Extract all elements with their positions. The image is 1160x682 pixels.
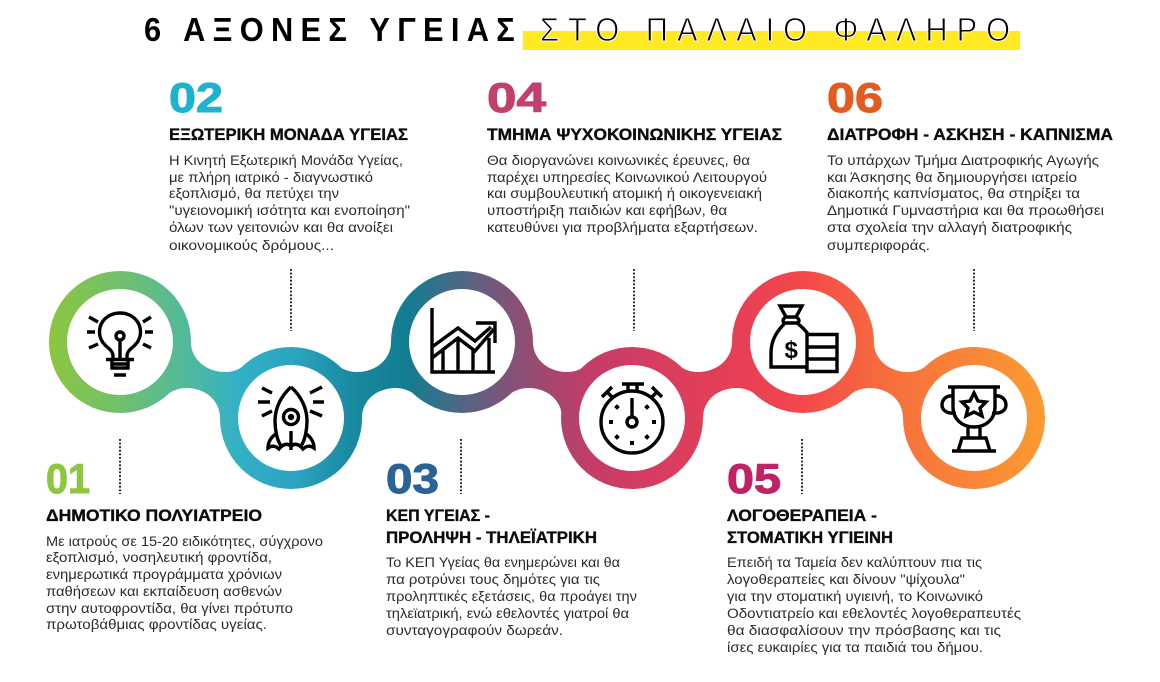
body 02: εξοπλισμό, θα πετύχει την	[169, 186, 339, 201]
heading 05: ΛΟΓΟΘΕΡΑΠΕΙΑ -	[727, 507, 877, 525]
icon: trophy	[942, 387, 1006, 451]
icon: money bag	[771, 306, 837, 372]
body 01: Με ιατρούς σε 15-20 ειδικότητες, σύγχρονο	[46, 534, 323, 549]
heading 03: ΠΡΟΛΗΨΗ - ΤΗΛΕΪΑΤΡΙΚΗ	[386, 529, 597, 547]
number 01: 01	[46, 455, 90, 502]
icon: rocket	[258, 387, 324, 450]
icon: light bulb	[87, 313, 153, 375]
heading 03	[386, 507, 597, 547]
body 05: ίσες ευκαιρίες για τα παιδιά του δήμου.	[727, 640, 983, 655]
body 02: Η Κινητή Εξωτερική Μονάδα Υγείας,	[169, 153, 403, 168]
body 05: λογοθεραπείες και δίνουν "ψίχουλα"	[727, 572, 965, 587]
body 01	[46, 534, 323, 632]
heading 05	[727, 507, 893, 547]
heading 02: ΕΞΩΤΕΡΙΚΗ ΜΟΝΑΔΑ ΥΓΕΙΑΣ	[169, 126, 408, 144]
body 03: συνταγογραφούν δωρεάν.	[386, 623, 563, 638]
body 01: ενημερωτικά προγράμματα χρόνιων	[46, 567, 282, 582]
body 02: με πλήρη ιατρικό - διαγνωστικό	[169, 170, 373, 185]
body 04: Θα διοργανώνει κοινωνικές έρευνες, θα	[487, 153, 750, 168]
body 06: Το υπάρχων Τμήμα Διατροφικής Αγωγής	[827, 153, 1100, 168]
body 03: Το ΚΕΠ Υγείας θα ενημερώνει και θα	[386, 555, 620, 570]
heading 05: ΣΤΟΜΑΤΙΚΗ ΥΓΙΕΙΝΗ	[727, 529, 893, 547]
body 06: και Άσκησης θα δημιουργήσει ιατρείο	[827, 170, 1077, 185]
title	[144, 11, 1020, 50]
connector: 01	[119, 439, 121, 494]
icon: money bag: $	[784, 337, 798, 364]
body 01: εξοπλισμό, νοσηλευτική φροντίδα,	[46, 550, 272, 565]
body 01: πρωτοβάθμιας φροντίδας υγείας.	[46, 617, 267, 632]
body 02: "υγειονομική ισότητα και ενοποίηση"	[169, 203, 410, 218]
panel: 06 nutrition exercise smoking	[827, 74, 1113, 253]
panel: 01 municipal polyclinic	[46, 455, 323, 632]
number 02: 02	[169, 74, 223, 121]
panel: 04 psychosocial health	[487, 74, 782, 235]
body 02: οικονομικούς δρόμους...	[169, 238, 334, 253]
connector: 02	[290, 269, 292, 331]
body 01: παθήσεων και εκπαίδευση ασθενών	[46, 584, 282, 599]
body 03: πα ροτρύνει τους δημότες για τις	[386, 572, 601, 587]
number 05: 05	[727, 455, 781, 502]
body 03	[386, 555, 637, 638]
body 06: στα σχολεία την αλλαγή διατροφικής	[827, 220, 1073, 235]
body 02: όλων των γειτονιών και θα ανοίξει	[169, 220, 393, 235]
highlight bar	[523, 31, 1020, 50]
body 05: Επειδή τα Ταμεία δεν καλύπτουν πια τις	[727, 555, 983, 570]
heading 03: ΚΕΠ ΥΓΕΙΑΣ -	[386, 507, 490, 525]
connector: 03	[460, 439, 462, 494]
body 03: τηλεϊατρική, ενώ εθελοντές γιατροί θα	[386, 606, 629, 621]
heading 04: ΤΜΗΜΑ ΨΥΧΟΚΟΙΝΩΝΙΚΗΣ ΥΓΕΙΑΣ	[487, 126, 782, 144]
body 05: για την στοματική υγιεινή, το Κοινωνικό	[727, 589, 983, 604]
number 04: 04	[487, 74, 547, 121]
body 06: συμπεριφοράς.	[827, 238, 930, 253]
body 05	[727, 555, 1022, 655]
body 05: Οδοντιατρείο και εθελοντές λογοθεραπευτές	[727, 606, 1022, 621]
heading 06: ΔΙΑΤΡΟΦΗ - ΑΣΚΗΣΗ - ΚΑΠΝΙΣΜΑ	[827, 126, 1113, 144]
body 05: θα διασφαλίσουν την πρόσβασης και τις	[727, 623, 1002, 638]
connector: 06	[973, 269, 975, 331]
heading 01: ΔΗΜΟΤΙΚΟ ΠΟΛΥΙΑΤΡΕΙΟ	[46, 507, 262, 525]
panel: 05 speech therapy and oral health	[727, 455, 1022, 655]
title: bold part: 6 ΑΞΟΝΕΣ ΥΓΕΙΑΣ	[144, 11, 515, 48]
connector: 05	[801, 439, 803, 494]
body 06: διακοπής καπνίσματος, θα στηρίξει τα	[827, 186, 1080, 201]
body 06	[827, 153, 1104, 253]
number 06: 06	[827, 74, 883, 121]
body 02	[169, 153, 410, 253]
ribbon timeline	[49, 271, 1045, 489]
body 04: κατευθύνει για προβλήματα εξαρτήσεων.	[487, 220, 758, 235]
body 06: Δημοτικά Γυμναστήρια και θα προωθήσει	[827, 203, 1104, 218]
body 04	[487, 153, 767, 235]
connector: 04	[633, 269, 635, 331]
body 03: προληπτικές εξετάσεις, θα προάγει την	[386, 589, 637, 604]
panel: 03 health citizen service centre	[386, 455, 637, 638]
icon: stopwatch	[601, 384, 663, 453]
body 04: παρέχει υπηρεσίες Κοινωνικού Λειτουργού	[487, 170, 767, 185]
body 01: στην αυτοφροντίδα, θα γίνει πρότυπο	[46, 601, 293, 616]
icon: growth chart	[432, 308, 495, 372]
title: light part: ΣΤΟ ΠΑΛΑΙΟ ΦΑΛΗΡΟ	[540, 11, 1010, 48]
panel: 02 external health unit	[169, 74, 410, 253]
body 04: υποστήριξη παιδιών και εφήβων, θα	[487, 203, 727, 218]
body 04: και συμβουλευτική ατομική ή οικογενειακή	[487, 186, 762, 201]
number 03: 03	[386, 455, 439, 502]
